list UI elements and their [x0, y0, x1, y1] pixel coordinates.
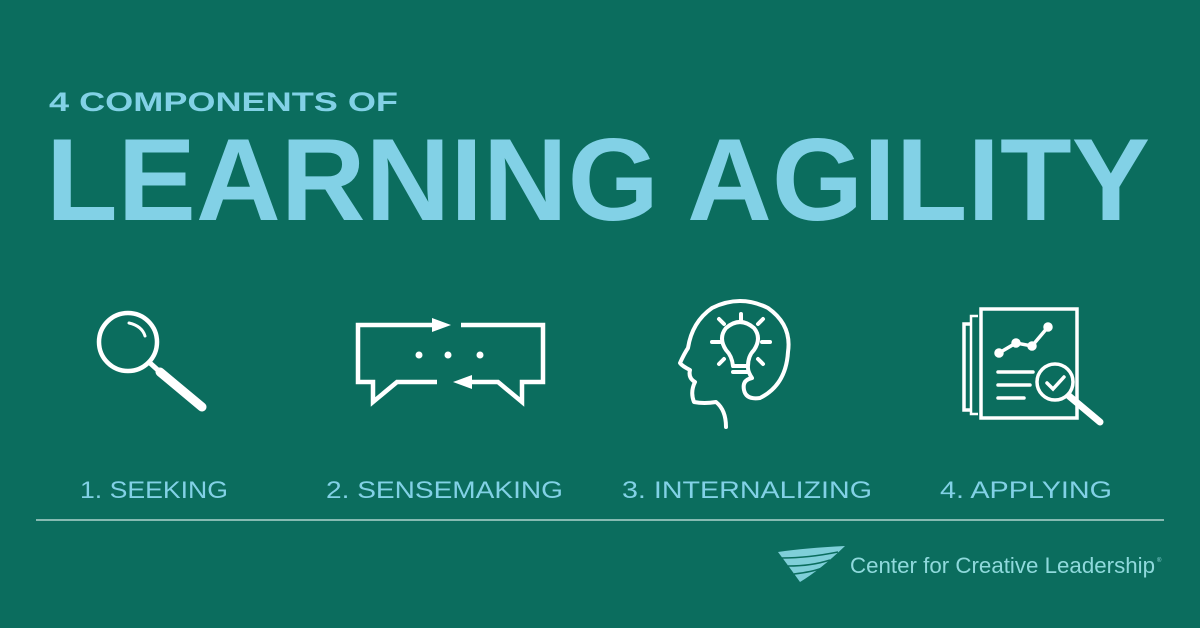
icon: speech bubbles: [358, 318, 543, 402]
icon: document with chart and magnifier: [964, 309, 1100, 422]
label: applying: 4. APPLYING: [940, 477, 1112, 504]
logo: Center for Creative Leadership: [850, 553, 1155, 578]
icon: head with lightbulb: [680, 301, 789, 427]
logo: [778, 546, 1162, 582]
label: internalizing: 3. INTERNALIZING: [622, 477, 872, 504]
icon: magnifying glass: [99, 313, 202, 407]
label: sensemaking: 2. SENSEMAKING: [326, 477, 563, 504]
title: LEARNING AGILITY: [46, 114, 1150, 245]
logo: ®: [1157, 557, 1162, 564]
label: seeking: 1. SEEKING: [80, 477, 228, 504]
subtitle: 4 COMPONENTS OF: [49, 87, 398, 117]
